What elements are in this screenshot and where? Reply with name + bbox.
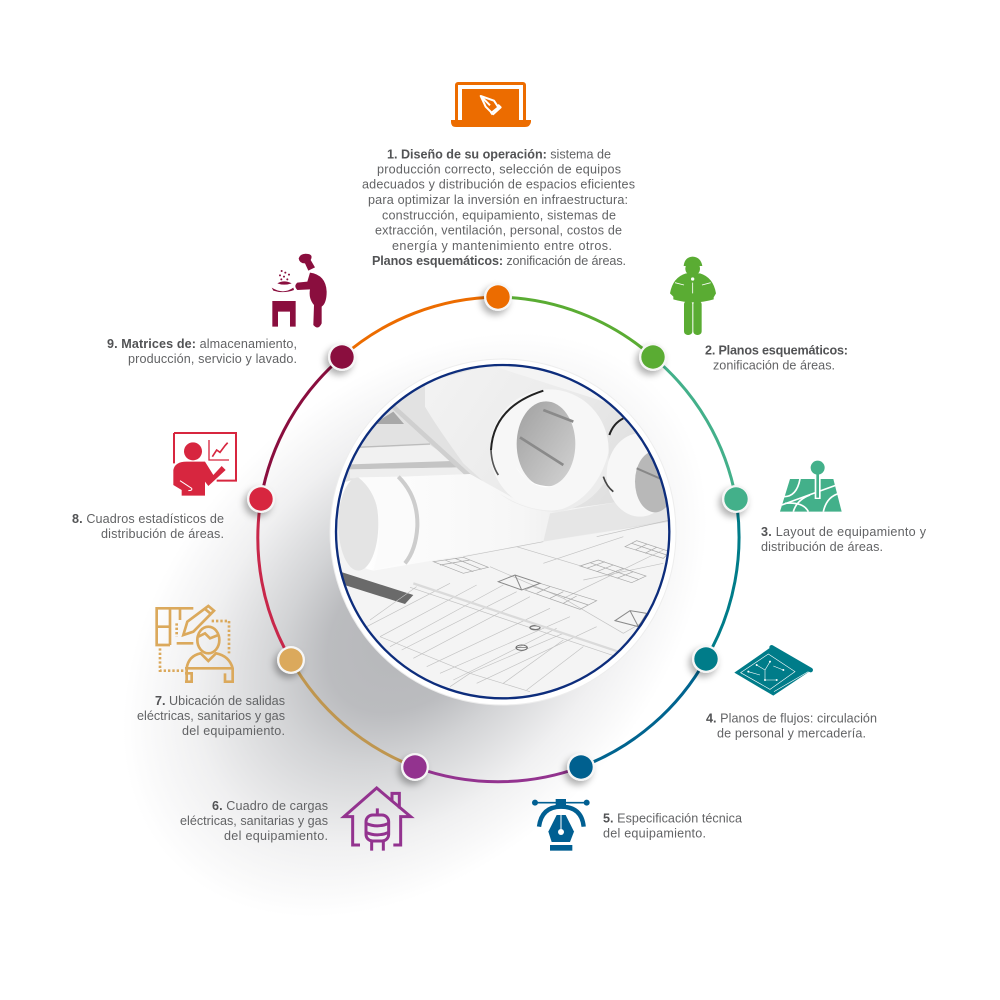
timeline nodes <box>247 283 750 781</box>
node 3 <box>722 485 750 513</box>
background shadow <box>8 218 822 1000</box>
text: step 1 description <box>362 147 635 268</box>
text: step 6 description: eléctricas, sanitarias y gas <box>180 814 328 828</box>
text: step 8 description: distribución de áreas. <box>101 527 224 541</box>
node 4 <box>692 645 720 673</box>
text: step 5 description <box>603 812 742 841</box>
text: step 6 description: 6. Cuadro de cargas <box>212 799 328 813</box>
text: step 8 description <box>72 512 224 541</box>
text: step 6 description <box>180 799 328 843</box>
text: step 3 description: 3. Layout de equipamiento y <box>761 525 927 539</box>
icon: blueprint sheet <box>734 647 812 696</box>
central photo of rolled blueprints <box>330 350 680 710</box>
text: step 4 description: 4. Planos de flujos: circulación <box>706 712 877 726</box>
text: step 1 description: adecuados y distribución de espacios eficientes <box>362 178 635 192</box>
text: step 1 description: Planos esquemáticos: zonificación de áreas. <box>372 254 626 268</box>
step 4: flow plans <box>706 647 877 741</box>
icon: laptop with pen nib <box>451 84 531 127</box>
icon: presenter with chart <box>173 433 236 496</box>
icon: worker with plan <box>670 257 716 335</box>
node 7 <box>277 646 305 674</box>
step 2: schematic plans <box>670 257 848 372</box>
ring of coloured arcs <box>258 297 739 782</box>
step 3: equipment layout <box>761 461 927 554</box>
text: step 1 description: extracción, ventilación, personal, costos de <box>375 224 622 238</box>
text: step 3 description: distribución de áreas. <box>761 540 883 554</box>
text: step 6 description: del equipamiento. <box>224 829 328 843</box>
icon: house with tank <box>344 788 411 851</box>
text: step 7 description: eléctricas, sanitarios y gas <box>137 709 285 723</box>
icon: person with floor plan <box>157 606 233 682</box>
text: step 9 description: 9. Matrices de: almacenamiento, <box>107 337 297 351</box>
node 8 <box>247 485 275 513</box>
node 1 <box>484 283 512 311</box>
icon: chef at table <box>272 254 327 327</box>
node 5 <box>567 753 595 781</box>
node 2 <box>639 343 667 371</box>
step 7: outlet locations <box>137 606 285 738</box>
text: step 4 description <box>706 712 877 741</box>
step 1: design of the operation <box>362 84 635 268</box>
text: step 5 description: 5. Especificación técnica <box>603 812 742 826</box>
text: step 9 description: producción, servicio y lavado. <box>128 352 297 366</box>
text: step 1 description: construcción, equipamiento, sistemas de <box>382 208 616 222</box>
text: step 1 description: 1. Diseño de su operación: sistema de <box>387 147 611 161</box>
text: step 7 description: del equipamiento. <box>182 724 285 738</box>
text: step 1 description: producción correcto, selección de equipos <box>377 162 621 176</box>
text: step 7 description: 7. Ubicación de salidas <box>155 694 285 708</box>
text: step 2 description <box>705 344 848 372</box>
step 5: technical specification <box>532 799 742 851</box>
step 8: statistical tables <box>72 433 236 541</box>
text: step 3 description <box>761 525 927 554</box>
icon: pen tool nib <box>532 799 590 851</box>
icon: map with pin <box>780 461 842 512</box>
step 6: load table <box>180 788 411 851</box>
text: step 4 description: de personal y mercadería. <box>717 727 866 741</box>
text: step 9 description <box>107 337 297 366</box>
text: step 1 description: energía y mantenimiento entre otros. <box>392 239 612 253</box>
text: step 1 description: para optimizar la inversión en infraestructura: <box>368 193 628 207</box>
node 9 <box>328 343 356 371</box>
text: step 7 description <box>137 694 285 738</box>
step 9: matrices <box>107 254 327 366</box>
text: step 2 description: zonificación de áreas. <box>713 358 835 372</box>
text: step 8 description: 8. Cuadros estadísticos de <box>72 512 224 526</box>
text: step 5 description: del equipamiento. <box>603 827 706 841</box>
text: step 2 description: 2. Planos esquemáticos: <box>705 344 848 358</box>
node 6 <box>401 753 429 781</box>
